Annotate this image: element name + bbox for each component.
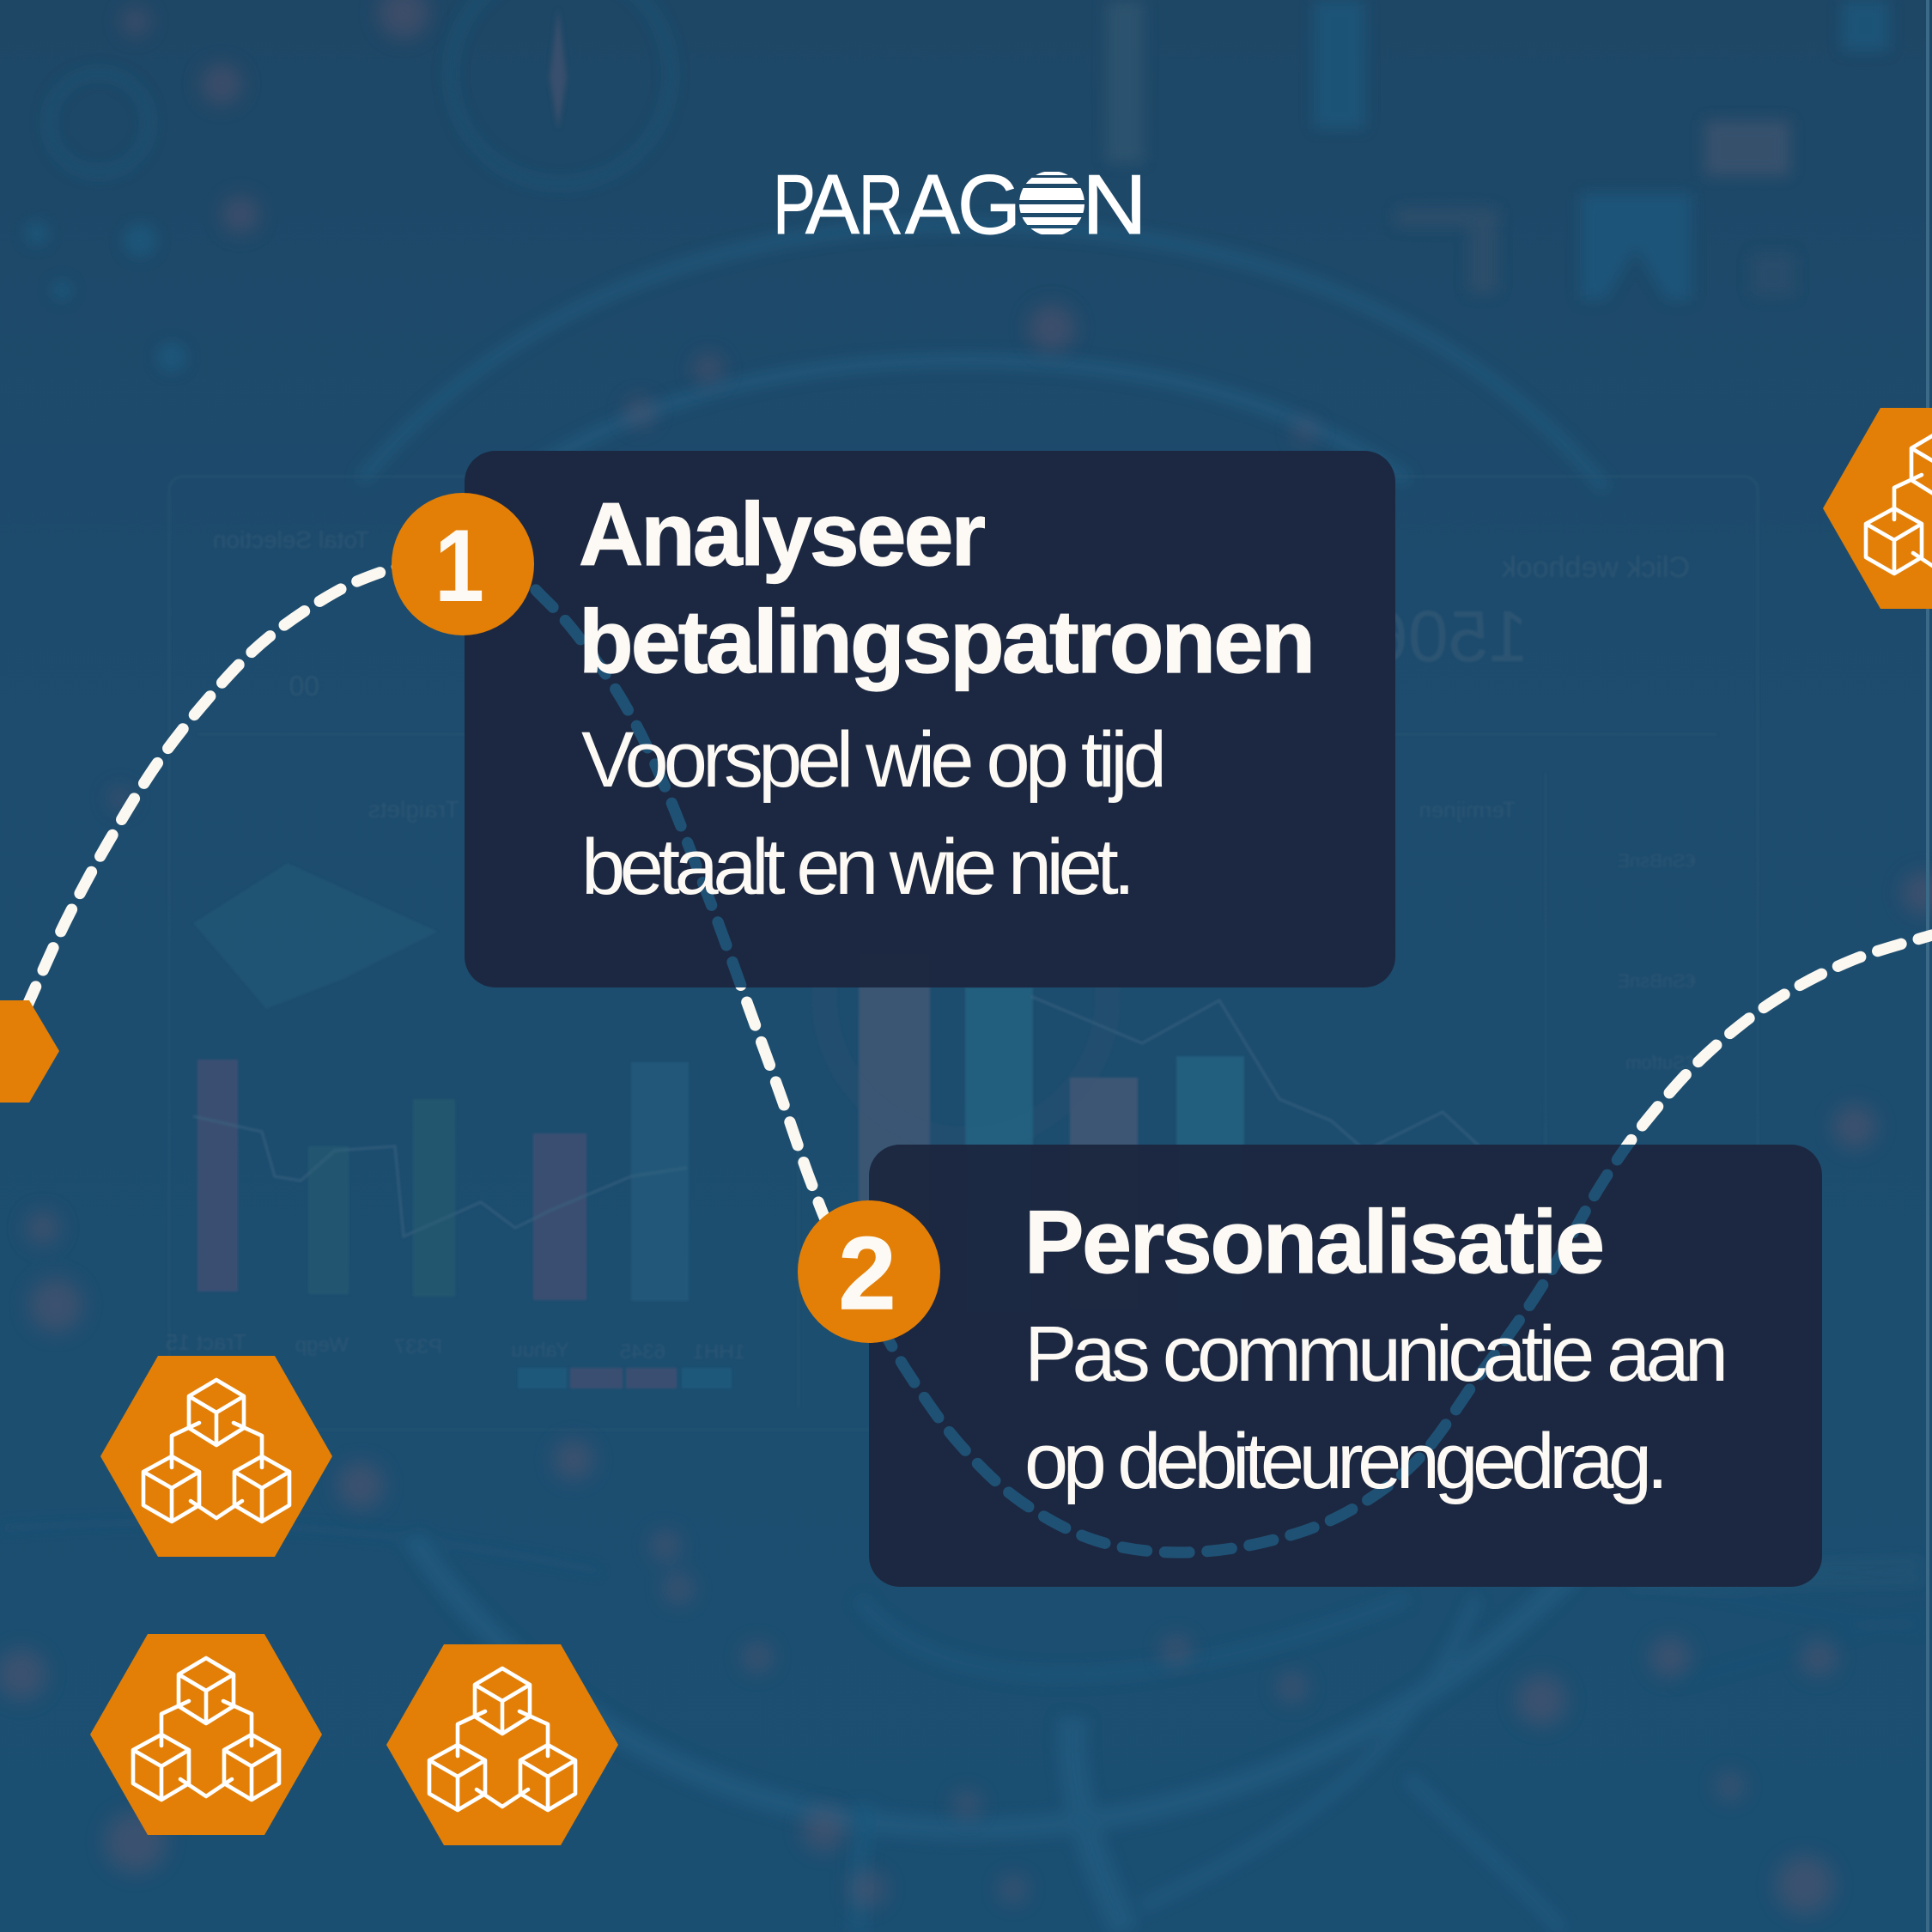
background: ghost dashboard text: Wegp xyxy=(295,1334,349,1357)
background: ghost dashboard text: Traiglets xyxy=(368,796,459,823)
logo letters: R xyxy=(859,157,903,252)
dashed path inside cards xyxy=(530,584,1635,1558)
background: blurred top shapes xyxy=(1106,0,1889,301)
background: compass needle xyxy=(550,9,567,129)
logo letters: G xyxy=(957,157,1021,252)
background: ghost dashboard text xyxy=(166,526,1696,1364)
card 1 heading: betalingspatronen xyxy=(579,592,1315,692)
step 2 badge xyxy=(798,1200,940,1343)
card 2 heading: Personalisatie xyxy=(1024,1193,1605,1292)
logo: PARAGON xyxy=(778,172,1140,235)
background: ghost dashboard text: €Sutfom xyxy=(1625,1052,1696,1073)
logo letters xyxy=(773,157,1147,252)
icon: hexagon blocks lower middle xyxy=(386,1644,618,1845)
background: ghost dashboard text: Tract 15 xyxy=(166,1329,246,1355)
step 1 badge: 1 xyxy=(434,508,484,623)
card 1 heading xyxy=(579,485,1315,692)
icon: hexagon blocks lower left bottom xyxy=(90,1634,322,1835)
background: ghost dashboard text: Click webhook xyxy=(1501,551,1690,584)
line chart xyxy=(193,996,1503,1236)
background: ghost dashboard text: Total Selection xyxy=(213,526,369,553)
dashed path xyxy=(26,564,1932,1552)
background: ghost dashboard text: 1HH1 xyxy=(693,1340,745,1364)
logo globe xyxy=(1019,172,1084,234)
background: ghost dashboard text: P337 xyxy=(394,1335,442,1358)
icon: hexagon blocks lower left top xyxy=(100,1356,332,1557)
panel: card 2 xyxy=(869,1145,1822,1587)
step 2 badge: 2 xyxy=(839,1216,896,1331)
card 1 body xyxy=(581,716,1167,911)
panel: card 1 xyxy=(465,451,1395,987)
icon: hexagon left edge xyxy=(0,1000,59,1103)
background: ghost dashboard text: 00 xyxy=(289,671,319,702)
background: right edge strip xyxy=(1926,0,1929,1932)
background: ghost dashboard text: €SnBsnE xyxy=(1617,970,1696,992)
logo letters: N xyxy=(1082,157,1147,252)
card 1 heading: Analyseer xyxy=(579,485,986,585)
background: compass rings xyxy=(49,0,671,184)
bar chart xyxy=(197,953,1331,1388)
card 1 text xyxy=(579,485,1315,911)
icon: hexagon blocks right edge xyxy=(1823,408,1932,609)
background: ghost dashboard text: Termijnen xyxy=(1419,797,1516,823)
background: dashboard panel xyxy=(169,477,1758,1430)
logo letters: A xyxy=(905,157,961,252)
background: faint chart area xyxy=(193,856,1503,1388)
background: ghost dashboard text: 6345 xyxy=(620,1340,665,1364)
background: ghost dashboard text: €SnBsnE xyxy=(1617,850,1696,872)
card 1 body: Voorspel wie op tijd xyxy=(581,716,1167,804)
card 2 text xyxy=(1024,1193,1728,1505)
background: ghost dashboard text: 15063 xyxy=(1327,596,1528,677)
card 2 body: op debiteurengedrag. xyxy=(1024,1418,1668,1505)
background: blue lights xyxy=(25,222,187,373)
card 2 body: Pas communicatie aan xyxy=(1024,1310,1728,1398)
logo letters: P xyxy=(773,157,816,252)
card 2 body xyxy=(1024,1310,1728,1505)
step 1 badge xyxy=(392,493,534,635)
logo letters: A xyxy=(805,157,860,252)
background: ghost dashboard text: Yahuu xyxy=(511,1339,569,1362)
card 1 body: betaalt en wie niet. xyxy=(581,823,1135,911)
